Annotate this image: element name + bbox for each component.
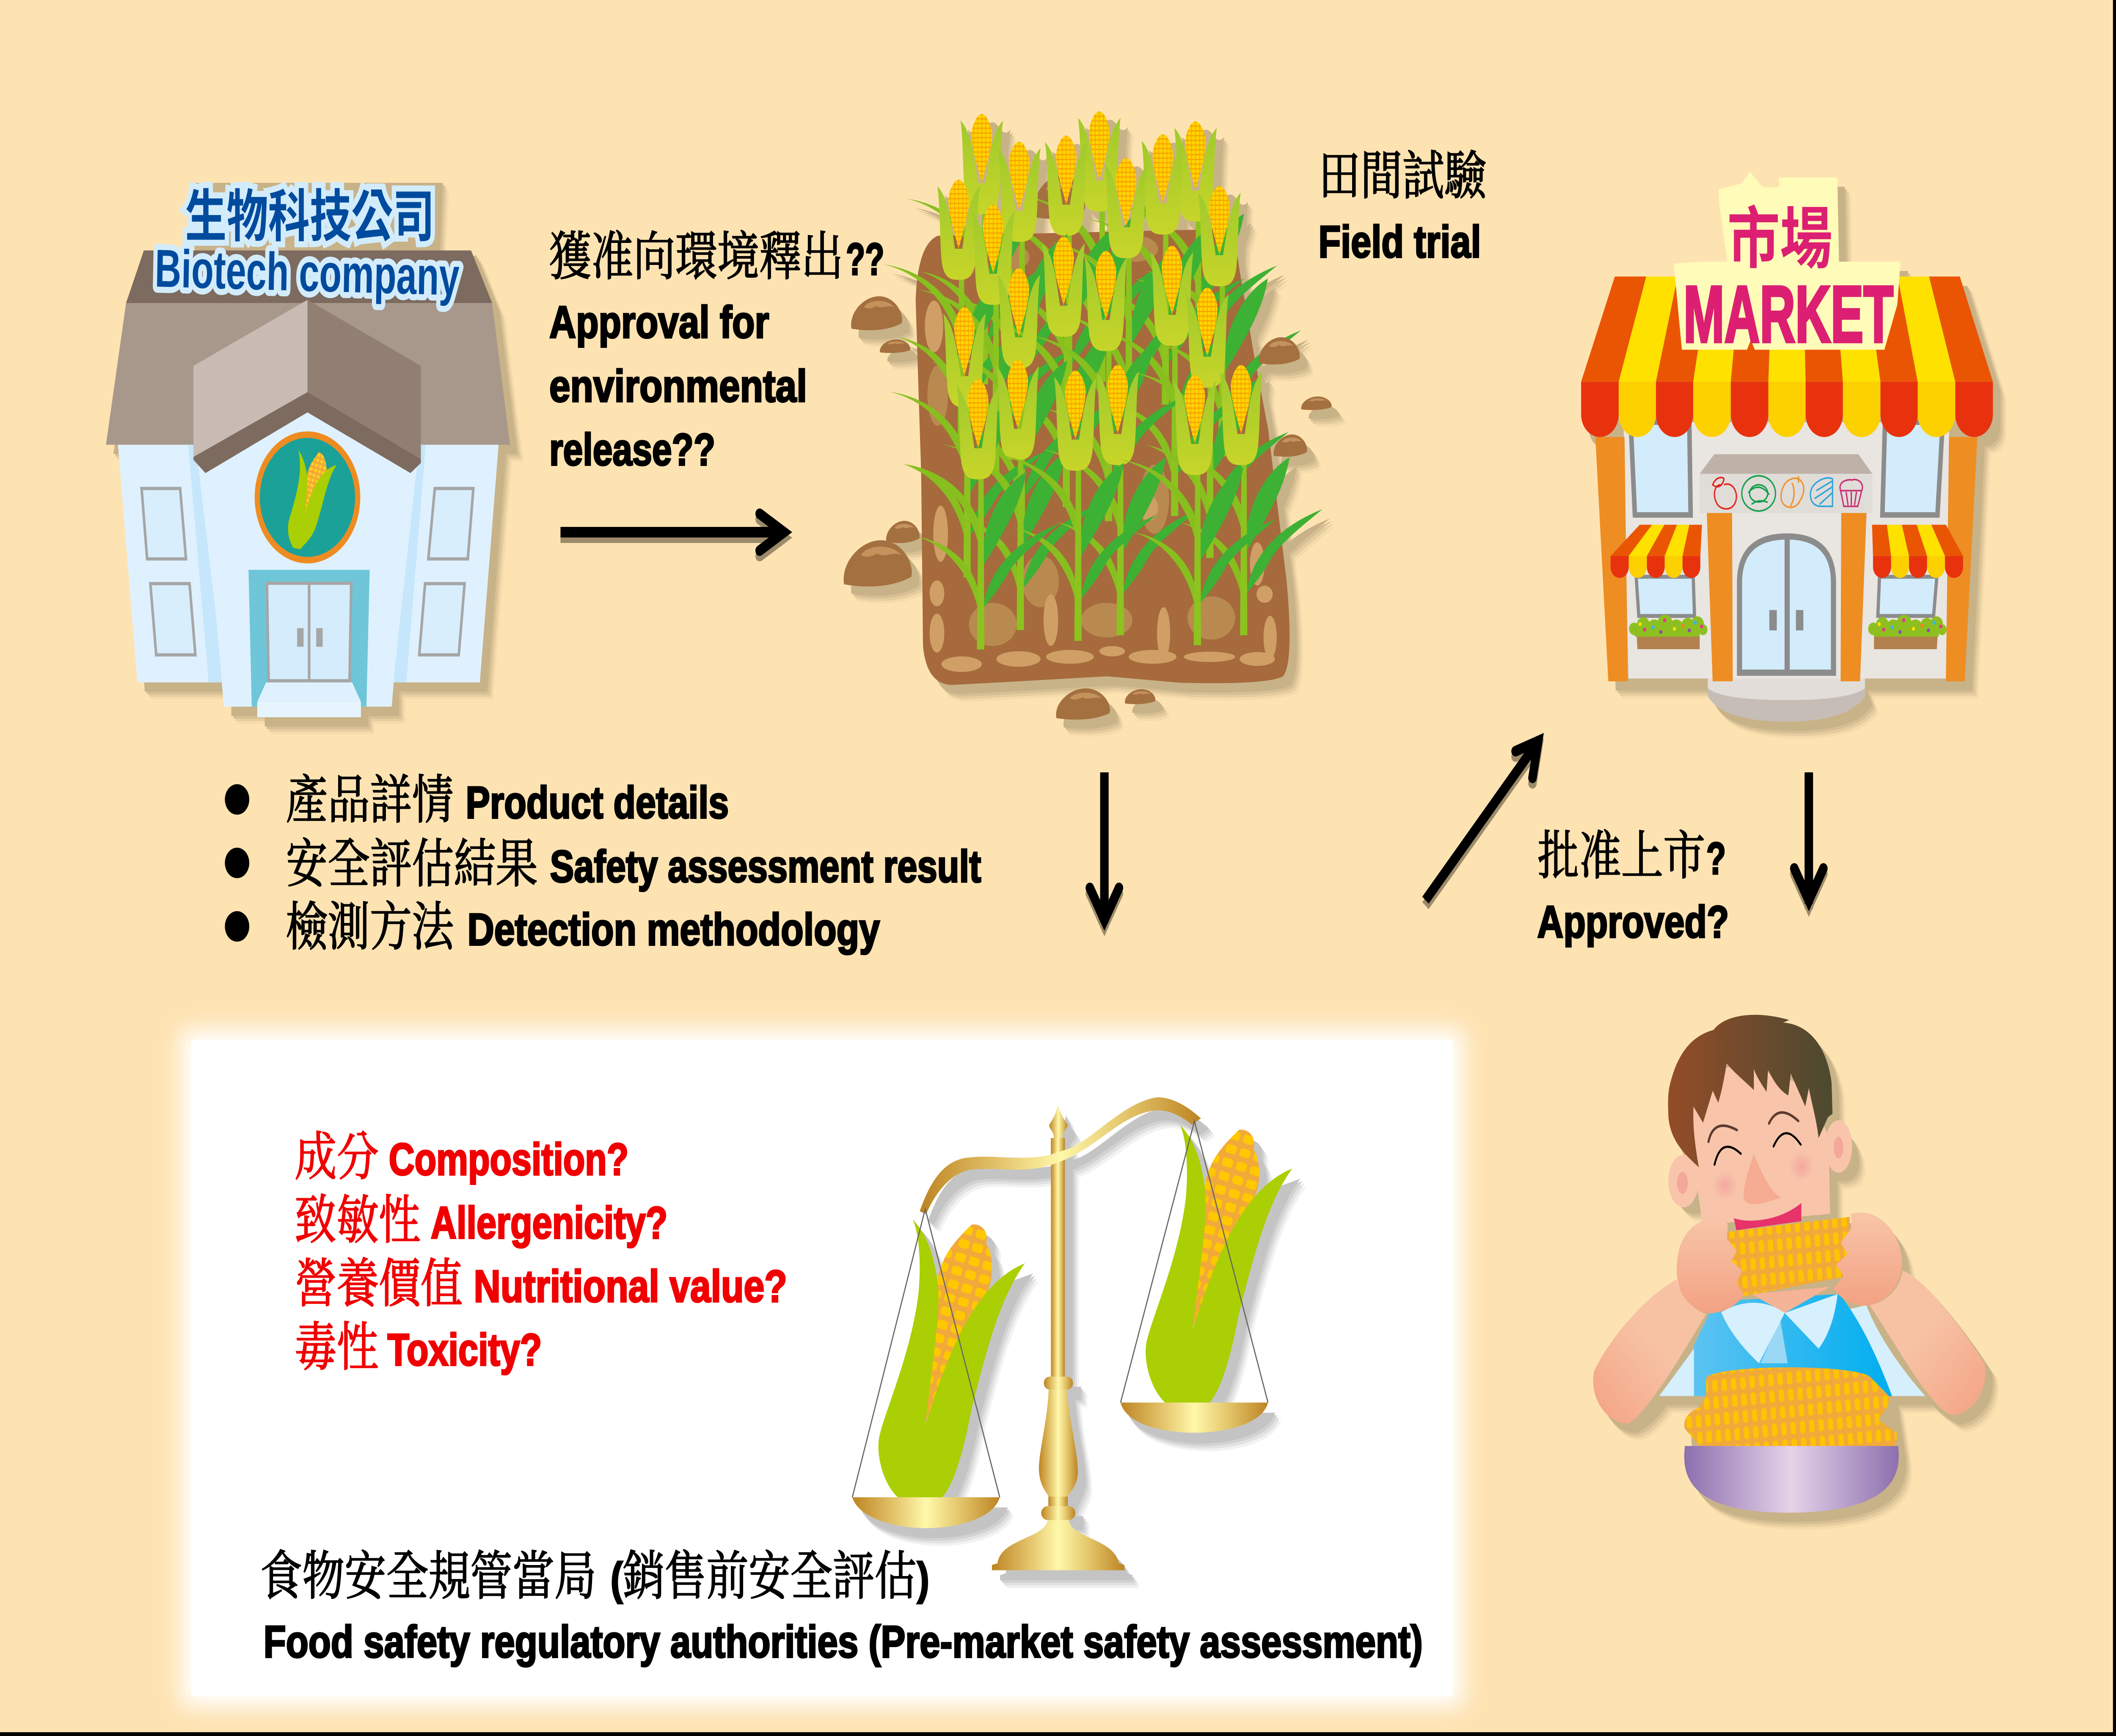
entrance canopy with food icons [1700, 454, 1872, 513]
soil [916, 229, 1289, 685]
illustration: market shop [1581, 172, 2006, 738]
text: approval for environmental release: release?? [549, 424, 715, 475]
sign: market: MARKET [1683, 269, 1893, 359]
text: assessment questions: 成分 [295, 1129, 379, 1187]
mouth [1734, 1203, 1801, 1230]
text: food safety regulatory authorities: ) [917, 1553, 929, 1604]
bowl [1684, 1446, 1899, 1513]
strings [852, 1121, 1268, 1497]
upper awning [1581, 276, 1993, 437]
text: approval for environmental release: Approval for [549, 297, 769, 347]
arrow: market down to consumer [1794, 772, 1824, 909]
sign: biotech company: 生物科技公司 [185, 185, 435, 248]
sign: market [1674, 172, 1901, 359]
text: field trial [1318, 148, 1487, 267]
text: approval for environmental release [549, 229, 884, 475]
panel: food safety regulators [191, 1040, 1453, 1696]
text: field trial: Field trial [1318, 216, 1481, 267]
rocks [844, 296, 1332, 719]
hands [1677, 1218, 1744, 1313]
text: approved: 批准上市 [1537, 828, 1705, 886]
text: assessment questions: Composition? [389, 1134, 628, 1185]
arrow: company to field [560, 514, 786, 556]
bullet list: submission documents: Product details [466, 777, 729, 828]
text: food safety regulatory authorities: ( [611, 1553, 623, 1604]
text: food safety regulatory authorities: 食物安全規管當局 [260, 1548, 596, 1606]
pans [852, 1497, 1000, 1528]
text: assessment questions: Nutritional value? [474, 1261, 787, 1312]
text: food safety regulatory authorities: 銷售前安全評估 [623, 1548, 916, 1606]
corn plants [883, 111, 1322, 650]
text: assessment questions: 毒性 [295, 1319, 379, 1377]
illustration: balance scale with corn [852, 1097, 1306, 1588]
nose [1744, 1154, 1781, 1204]
text: approved: Approved? [1537, 896, 1729, 947]
illustration: corn field trial [844, 111, 1345, 736]
arrow: authority up to market [1425, 740, 1539, 906]
sign: market: 市場 [1727, 201, 1832, 277]
text: food safety regulatory authorities [260, 1548, 1423, 1667]
sign: biotech company [154, 185, 460, 307]
corn pile [1684, 1367, 1897, 1447]
sign: biotech company: Biotech company [154, 238, 460, 307]
bullet list: submission documents: 檢測方法 [286, 899, 455, 957]
text: approved [1537, 828, 1729, 947]
bullet list: submission documents: Safety assessment result [550, 841, 981, 892]
beam [920, 1097, 1201, 1214]
corn right [1146, 1125, 1292, 1403]
bullet list: submission documents [225, 772, 981, 957]
eyes and brows [1708, 1113, 1801, 1165]
stand [992, 1105, 1124, 1570]
rock behind plants [1033, 175, 1085, 219]
illustration: biotech company building [106, 183, 523, 734]
bullet list: submission documents: 產品詳情 [286, 772, 454, 830]
small awnings [1611, 525, 1963, 578]
bullet list: submission documents: Detection methodology [467, 904, 880, 955]
corn left [879, 1219, 1025, 1497]
text: approval for environmental release: environmental [549, 361, 807, 411]
text: approval for environmental release: 獲准向環境釋出 [549, 229, 843, 287]
text: assessment questions: Toxicity? [387, 1324, 542, 1375]
arrow: field down to authority [1090, 772, 1119, 928]
planters [1629, 615, 1947, 649]
text: assessment questions: Allergenicity? [431, 1197, 667, 1248]
hair [1668, 1015, 1832, 1167]
text: assessment questions: 營養價值 [295, 1256, 463, 1314]
bullet list: submission documents: 安全評估結果 [286, 836, 538, 894]
text: food safety regulatory authorities: Food safety regulatory authorities (Pre-market safety assessment) [264, 1616, 1423, 1667]
text: assessment questions [295, 1129, 787, 1377]
held corn cob [1726, 1217, 1851, 1297]
text: approval for environmental release: ?? [846, 234, 884, 284]
illustration: boy eating corn [1593, 1015, 1999, 1529]
text: field trial: 田間試驗 [1318, 148, 1487, 206]
text: approved: ? [1706, 833, 1726, 884]
door [1739, 537, 1833, 673]
text: assessment questions: 致敏性 [295, 1192, 421, 1250]
arms [1593, 1279, 1706, 1424]
